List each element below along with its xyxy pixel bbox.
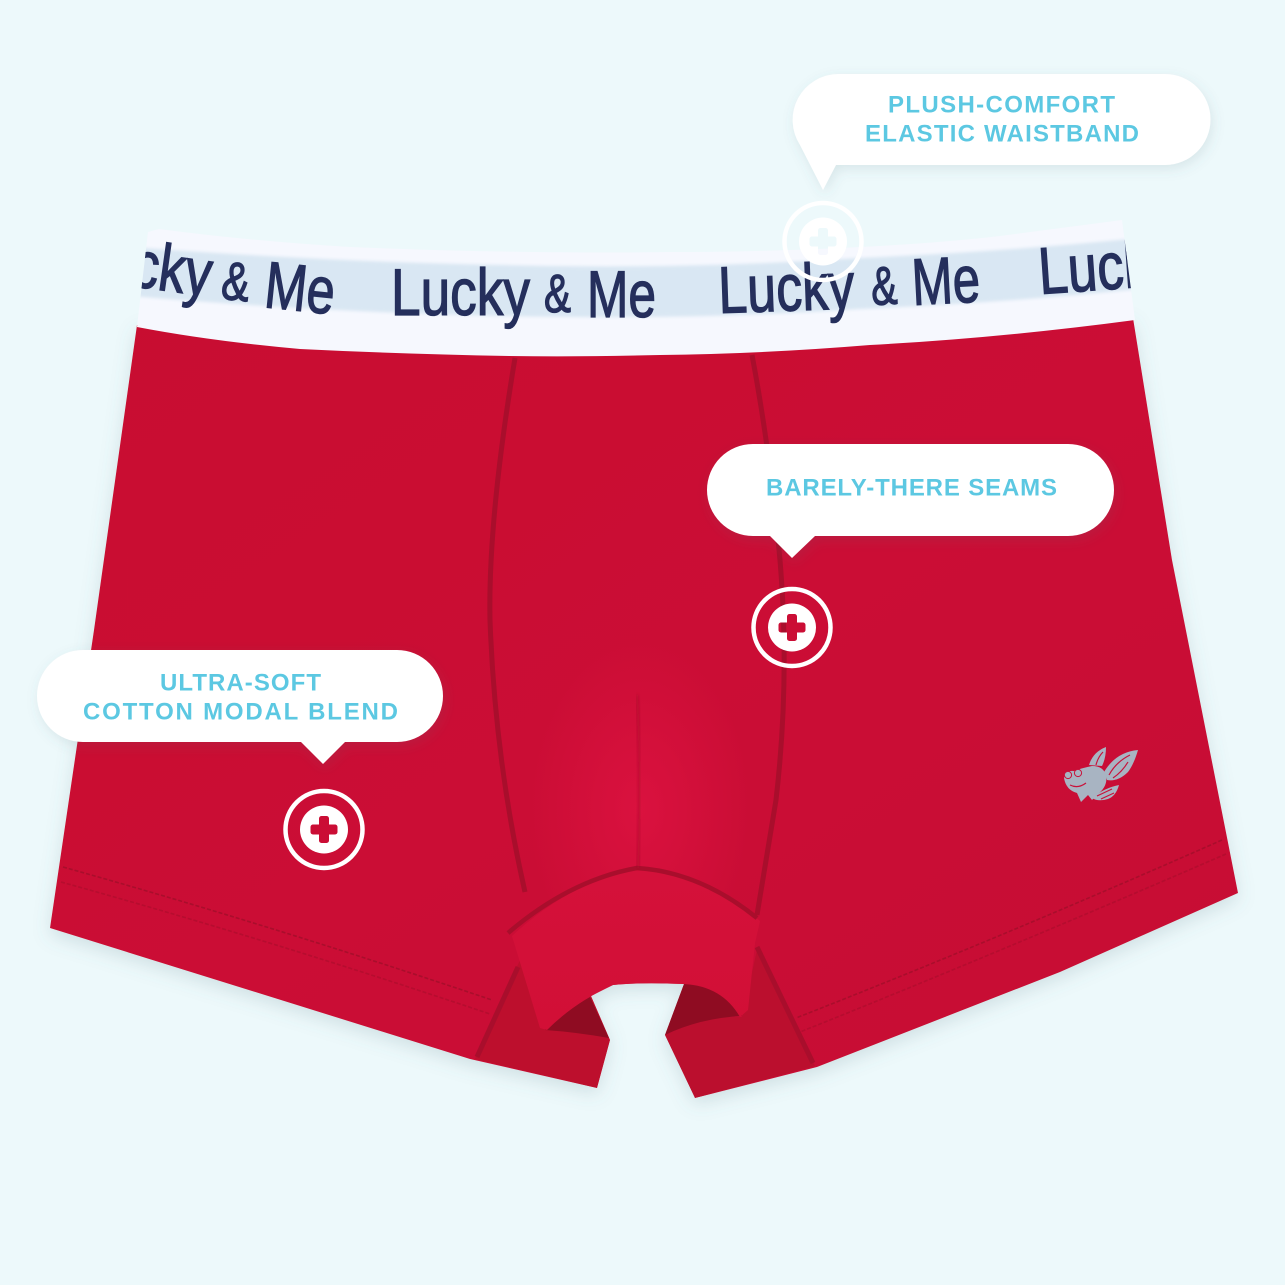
waistband logo text: & xyxy=(544,264,571,324)
fish fin rays xyxy=(1096,752,1130,799)
seams xyxy=(61,355,1226,1063)
icon: fish logo xyxy=(1064,747,1138,802)
callout: fabric: COTTON MODAL BLEND xyxy=(83,698,398,726)
waistband logo text xyxy=(142,240,1131,330)
waistband logo text: Lucky xyxy=(1036,225,1179,308)
icon: plus marker seams xyxy=(754,589,830,666)
right front seam xyxy=(752,355,784,915)
icon: plus marker fabric xyxy=(286,791,362,868)
callout: fabric xyxy=(37,650,443,764)
callout: seams: BARELY-THERE SEAMS xyxy=(766,474,1057,502)
fish body xyxy=(1064,766,1106,802)
pouch stitch line xyxy=(508,868,757,933)
left hem stitches xyxy=(63,867,492,1000)
waistband logo text: Lucky xyxy=(70,218,217,311)
right hem stitches xyxy=(796,840,1222,1018)
pouch cuff xyxy=(512,869,760,1030)
waistband logo text: & xyxy=(869,256,899,317)
fish fins xyxy=(1089,747,1106,766)
waistband logo text: & xyxy=(219,251,253,313)
right leg seam xyxy=(757,947,813,1063)
fish face xyxy=(1064,771,1072,779)
icon: plus marker waistband xyxy=(784,203,862,280)
callout: waistband: ELASTIC WAISTBAND xyxy=(865,120,1139,148)
waistband grey stripe xyxy=(130,238,1140,317)
callout: fabric: ULTRA-SOFT xyxy=(160,670,321,696)
inner leg opening right xyxy=(665,984,742,1035)
left front seam xyxy=(490,358,525,892)
centre fold xyxy=(637,695,640,868)
callout: seams xyxy=(707,444,1114,558)
callout: waistband xyxy=(793,74,1210,190)
waistband xyxy=(137,220,1135,356)
briefs body xyxy=(50,318,1238,1098)
rear leg flaps xyxy=(475,960,610,1088)
waistband logo text: Me xyxy=(910,242,982,319)
waistband logo text: Me xyxy=(262,247,339,328)
product: boxer briefs xyxy=(50,218,1238,1098)
callout: waistband: PLUSH-COMFORT xyxy=(888,92,1115,118)
waistband logo text: Lucky xyxy=(391,255,530,329)
inner leg opening left xyxy=(545,997,609,1038)
soft fabric shading xyxy=(475,729,815,1098)
waistband logo text: Me xyxy=(587,257,656,331)
waistband logo text: Lucky xyxy=(717,248,855,327)
left leg seam xyxy=(477,967,518,1057)
